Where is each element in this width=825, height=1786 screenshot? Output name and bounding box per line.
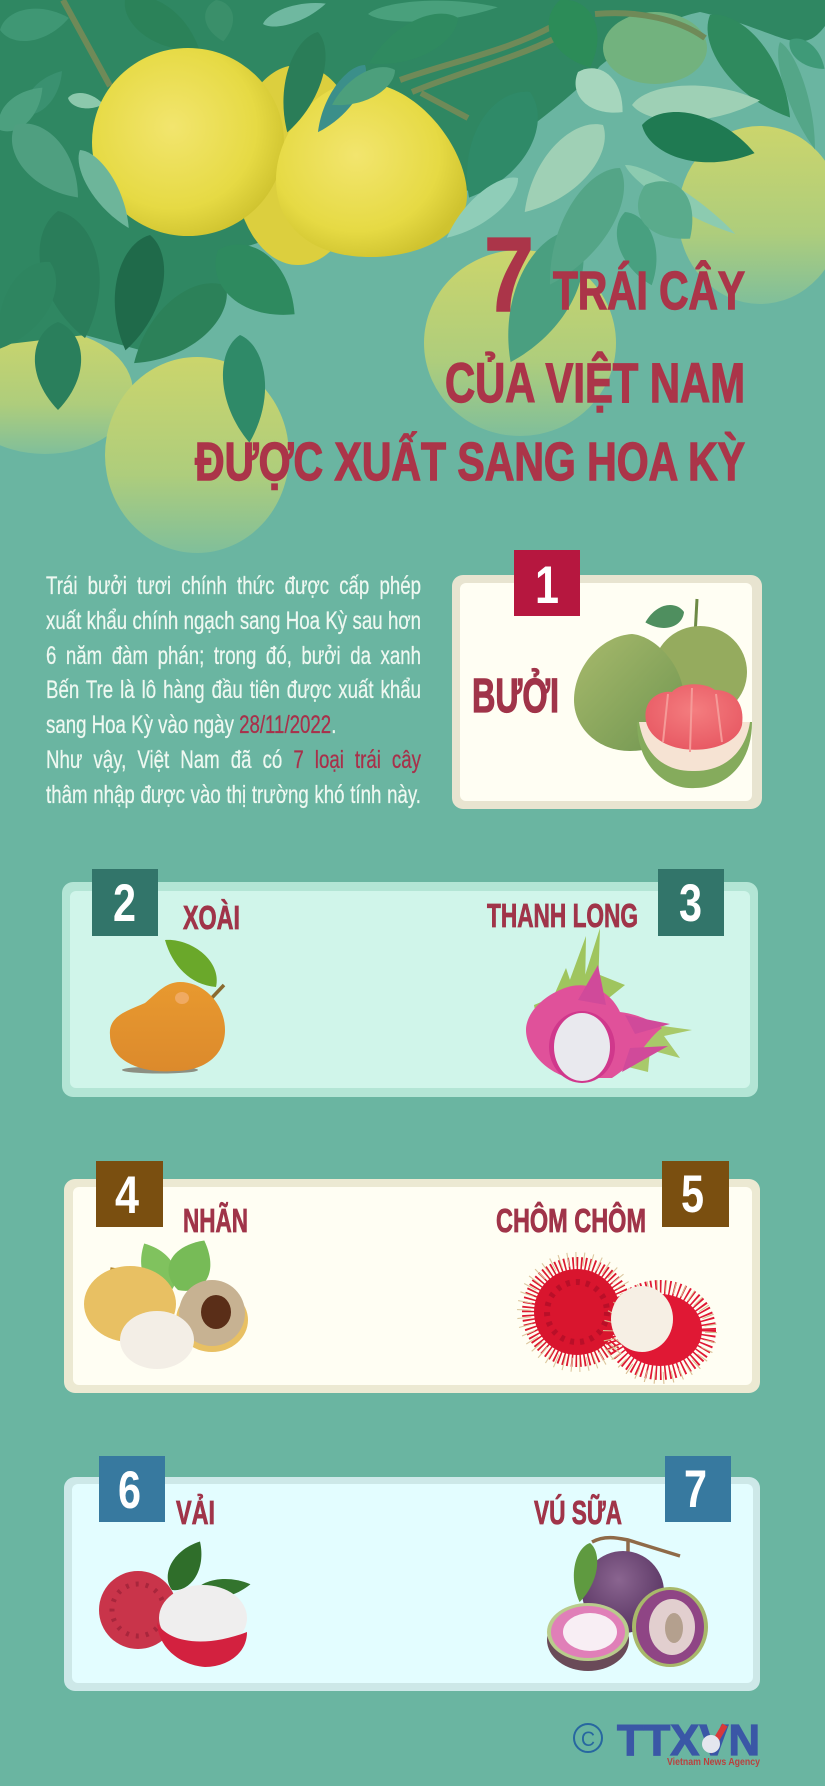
fruit: pale pomelo bottom (105, 357, 289, 553)
number badge 5 (662, 1161, 729, 1227)
logo wordmark: TTXVN (617, 1716, 760, 1765)
number badge 3 (658, 869, 724, 936)
text block: introduction: thâm nhập được vào thị trường khó tính này. (46, 781, 421, 809)
leaves in front (0, 27, 761, 444)
panel inner (70, 891, 750, 1088)
label: CHÔM CHÔM: CHÔM CHÔM (496, 1201, 646, 1239)
fruit: yellow pomelo left (92, 48, 284, 236)
text block: introduction: xuất khẩu chính ngạch sang Hoa Kỳ sau hơn (46, 607, 421, 635)
icon: longan (84, 1231, 248, 1369)
icon: star apple (547, 1538, 708, 1671)
icon: pomelo (574, 599, 752, 788)
number badge 1 (514, 550, 580, 616)
fruit: yellow pomelo behind (234, 65, 362, 265)
text block: introduction: Bến Tre là lô hàng đầu tiên được xuất khẩu (46, 676, 421, 704)
number badge 3: 3 (679, 874, 702, 933)
number badge 7 (665, 1456, 731, 1522)
icon: mango (110, 940, 225, 1074)
text block: introduction: 6 năm đàm phán; trong đó, bưởi da xanh (46, 642, 421, 670)
number badge 6 (99, 1456, 165, 1522)
panel inner (73, 1187, 752, 1385)
hero photo: pomelo branch (0, 0, 825, 553)
text block: introduction: Như vậy, Việt Nam đã có 7 loại trái cây (46, 746, 421, 774)
panel frame (64, 1477, 760, 1691)
number badge 5: 5 (681, 1165, 704, 1224)
icon: dragon fruit (526, 928, 692, 1083)
foliage backdrop (0, 0, 825, 350)
number badge 2 (92, 869, 158, 936)
panel: 2 and 3 mango, dragon fruit (62, 869, 758, 1097)
label: VẢI: VẢI (176, 1494, 215, 1531)
copyright mark (574, 1724, 602, 1752)
panel: 4 and 5 longan, rambutan (64, 1161, 760, 1393)
panel inner (460, 583, 752, 801)
title line 1: TRÁI CÂY (553, 260, 745, 321)
panel: 1 pomelo (452, 550, 762, 809)
label: BƯỞI: BƯỞI (472, 668, 559, 723)
fruit: pale pomelo right (678, 126, 825, 304)
number badge 4 (96, 1161, 163, 1227)
panel: 6 and 7 lychee, star apple (64, 1456, 760, 1691)
label: XOÀI: XOÀI (183, 899, 240, 936)
text block: introduction: Trái bưởi tươi chính thức được cấp phép (46, 572, 421, 600)
logo red V accent (709, 1725, 725, 1752)
logo globe (702, 1735, 720, 1753)
fruit: pale pomelo behind title (424, 250, 616, 436)
icon: rambutan (524, 1259, 711, 1378)
text block: introduction: sang Hoa Kỳ vào ngày 28/11/2022. (46, 711, 336, 739)
icon: lychee (99, 1535, 252, 1667)
title number 7: 7 (484, 216, 534, 334)
title (195, 216, 745, 492)
number badge 7: 7 (684, 1460, 707, 1519)
label: THANH LONG: THANH LONG (487, 897, 638, 934)
number badge 4: 4 (115, 1166, 139, 1225)
logo tagline: Vietnam News Agency (667, 1756, 760, 1768)
fruit: yellow pomelo right (276, 82, 467, 257)
panel inner (72, 1484, 753, 1683)
text block: introduction (46, 572, 421, 809)
copyright mark: C (581, 1728, 595, 1751)
number badge 1: 1 (535, 556, 559, 615)
fruit: pale pomelo lower left (0, 330, 133, 454)
lighter background foliage (603, 12, 707, 84)
label: NHÃN: NHÃN (183, 1202, 248, 1239)
logo: TTXVN (574, 1716, 760, 1768)
number badge 2: 2 (113, 874, 136, 933)
number badge 6: 6 (118, 1461, 141, 1520)
panel frame (62, 882, 758, 1097)
label: VÚ SỮA: VÚ SỮA (534, 1494, 622, 1531)
branch main (63, 0, 705, 118)
panel frame (452, 575, 762, 809)
panel frame (64, 1179, 760, 1393)
leaves behind fruit (0, 0, 825, 153)
